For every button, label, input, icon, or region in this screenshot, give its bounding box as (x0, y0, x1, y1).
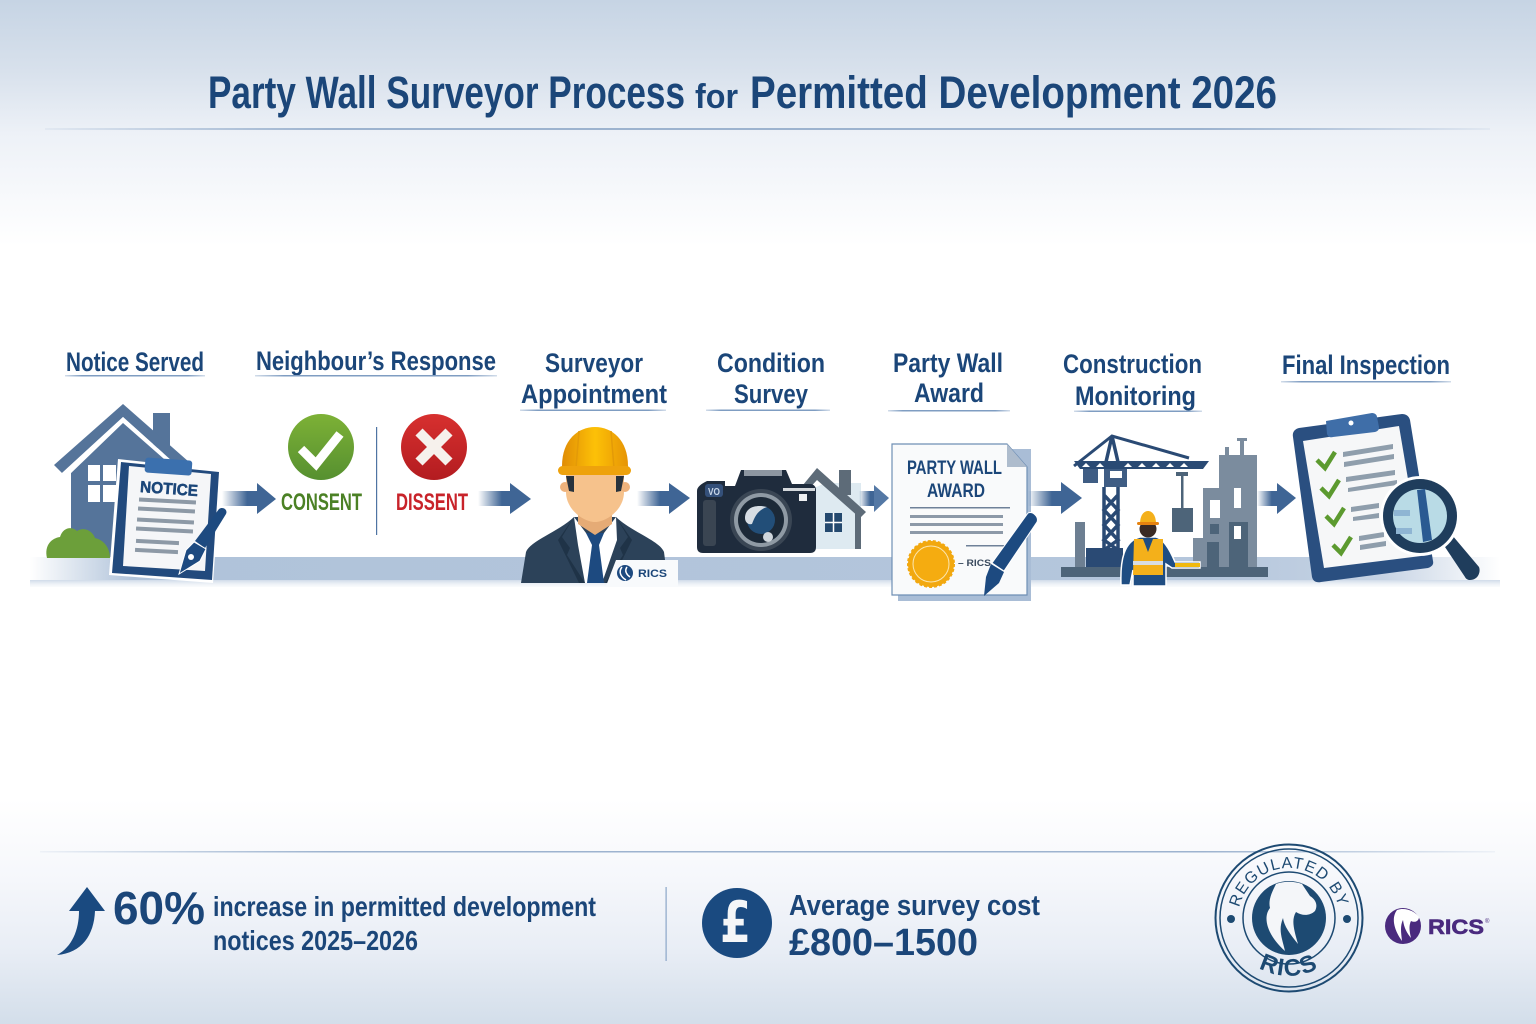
heading: party wall award: Award (914, 378, 984, 408)
icon: pound coin (702, 888, 772, 958)
icon: notice clipboard (109, 457, 221, 583)
heading: neighbour's response: Neighbour’s Response (256, 346, 496, 376)
icon: camera (697, 470, 816, 553)
icon: notice clipboard: NOTICE (140, 479, 199, 500)
icon: surveyor figure (521, 427, 668, 583)
badge: RICS (606, 560, 678, 586)
title: Permitted Development 2026 (750, 67, 1277, 118)
heading: party wall award (888, 348, 1010, 412)
icon: worker (1121, 511, 1200, 586)
heading: notice served: Notice Served (66, 347, 204, 377)
step 2: neighbour's response (255, 346, 497, 535)
title (208, 67, 1277, 118)
arrow 1 (222, 483, 276, 514)
label: dissent: DISSENT (396, 489, 468, 516)
icon: house behind camera (803, 468, 866, 549)
badge: regulated by RICS (1214, 844, 1364, 992)
icon: house (54, 404, 190, 557)
icon: seal (908, 541, 954, 587)
logo: RICS (1385, 908, 1490, 944)
logo: RICS: ® (1485, 918, 1490, 925)
badge: RICS: RICS (638, 568, 667, 580)
icon: dissent cross (401, 414, 467, 480)
step 4: condition survey (697, 348, 866, 553)
statistic: 60% increase (57, 882, 596, 956)
arrow 5 (1028, 482, 1082, 514)
heading: construction monitoring: Construction (1063, 349, 1202, 379)
icon: building (1193, 438, 1257, 567)
arrow 2 (478, 483, 531, 514)
heading: condition survey: Condition (717, 348, 825, 378)
icon: award document (892, 444, 1031, 601)
icon: award document: AWARD (927, 481, 985, 502)
statistic: average cost (702, 888, 1040, 964)
step 1: notice served (46, 347, 226, 583)
icon: consent tick (288, 414, 354, 480)
icon: up arrow (57, 887, 105, 955)
title: for (695, 78, 738, 116)
step 7: final inspection (1281, 350, 1480, 582)
icon: final clipboard (1293, 413, 1433, 582)
icon: camera: VO (708, 487, 720, 498)
heading: party wall award: Party Wall (893, 348, 1003, 378)
heading: surveyor appointment: Appointment (521, 379, 667, 409)
icon: award document: – RICS (958, 558, 991, 568)
arrow 6 (1257, 483, 1296, 514)
icon: tower crane (1061, 436, 1268, 577)
text: increase description: increase in permitted development (213, 891, 596, 922)
heading: surveyor appointment (520, 348, 667, 411)
label: consent: CONSENT (281, 489, 362, 516)
title: Party Wall Surveyor Process (208, 67, 685, 118)
ground band (30, 557, 1500, 587)
heading: condition survey: Survey (734, 379, 808, 409)
figure: cost range: £800–1500 (789, 922, 978, 964)
heading: final inspection: Final Inspection (1282, 350, 1450, 380)
icon: award document: PARTY WALL (907, 458, 1002, 479)
badge: regulated by RICS: REGULATED BY (1229, 857, 1349, 906)
heading: condition survey (706, 348, 830, 411)
step 5: party wall award (888, 348, 1037, 601)
heading: construction monitoring (1063, 349, 1202, 412)
icon: pen (984, 513, 1037, 596)
heading: surveyor appointment: Surveyor (545, 348, 643, 378)
step 6: construction monitoring (1061, 349, 1268, 586)
arrow 3 (637, 483, 690, 514)
logo: RICS: RICS (1428, 916, 1484, 939)
icon: bush (46, 528, 110, 558)
icon: magnifying glass (1380, 476, 1480, 580)
icon: pound coin: £ (720, 890, 751, 956)
text: average survey cost: Average survey cost (789, 890, 1040, 922)
arrow 4 (859, 485, 889, 512)
step 3: surveyor appointment (520, 348, 678, 586)
heading: construction monitoring: Monitoring (1075, 381, 1196, 411)
badge: regulated by RICS: RICS (1260, 954, 1316, 976)
figure: 60%: 60% (113, 882, 205, 934)
text: increase description (213, 891, 596, 956)
icon: fountain pen (179, 508, 226, 574)
text: increase description: notices 2025–2026 (213, 925, 418, 956)
